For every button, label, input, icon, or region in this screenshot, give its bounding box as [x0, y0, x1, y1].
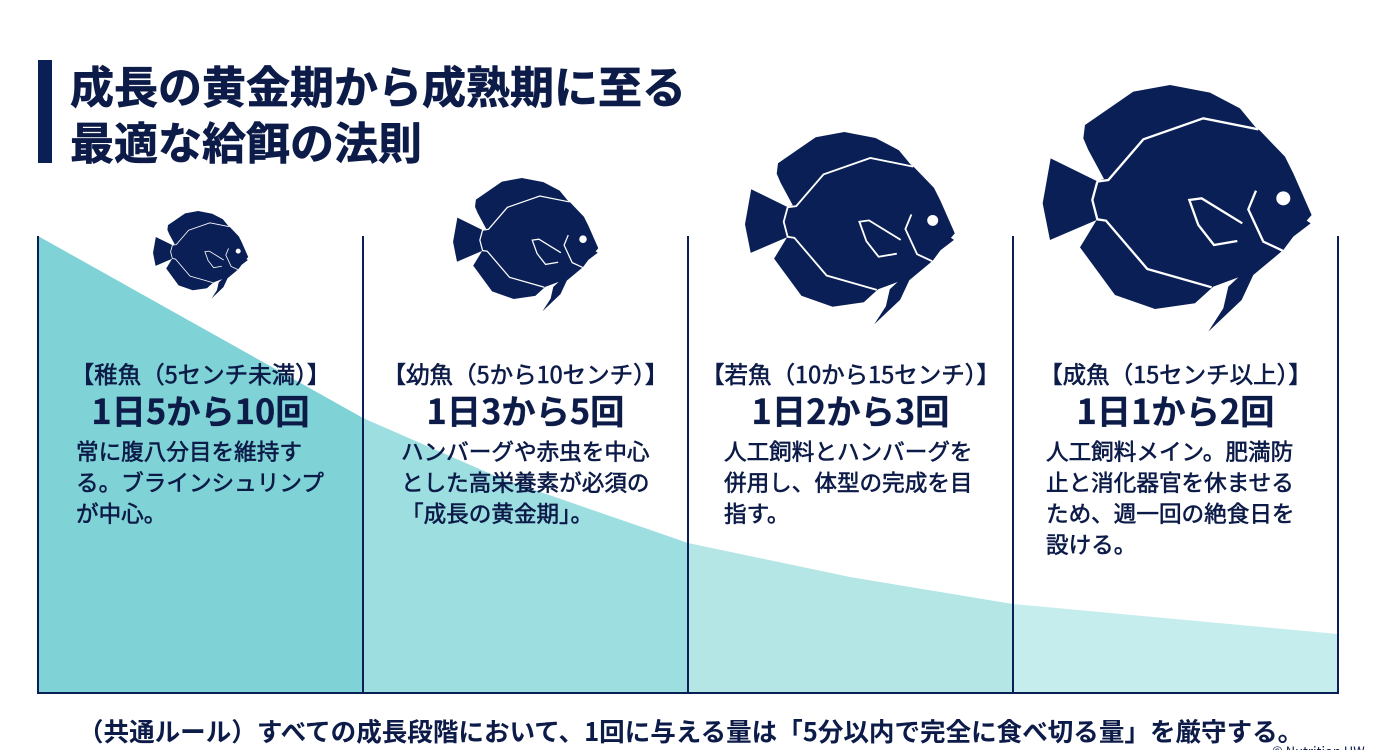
stage 2 description: ハンバーグや赤虫を中心	[401, 434, 650, 467]
stage 2 frequency: 1日3から5回	[427, 384, 624, 434]
stage 2 description: 「成長の黄金期」。	[401, 496, 593, 529]
stage 4 description: 止と消化器官を休ませる	[1046, 465, 1294, 498]
stage 1 description: 常に腹八分目を維持す	[76, 434, 302, 467]
common rule footer: （共通ルール）すべての成長段階において、1回に与える量は「5分以内で完全に食べ切る量」を厳守する。	[78, 712, 1303, 749]
title: 最適な給餌の法則	[70, 108, 422, 172]
stage 3 description: 併用し、体型の完成を目	[724, 465, 973, 498]
stage 3 description: 指す。	[724, 496, 790, 529]
stage 3 description	[724, 434, 973, 529]
title accent bar	[38, 60, 52, 163]
stage 4 description: 設ける。	[1046, 527, 1136, 560]
stage 4 description: 人工飼料メイン。肥満防	[1046, 434, 1293, 467]
stage 3 frequency: 1日2から3回	[752, 384, 949, 434]
stage 1 description: が中心。	[76, 496, 166, 529]
stage 4 description: ため、週一回の絶食日を	[1046, 496, 1295, 529]
stage 1 description: る。ブラインシュリンプ	[76, 465, 324, 498]
stage 2 description: とした高栄養素が必須の	[401, 465, 650, 498]
stage 4 label: 【成魚（15センチ以上）】	[1039, 356, 1312, 390]
title: 成長の黄金期から成熟期に至る	[70, 52, 686, 116]
stage 1 frequency: 1日5から10回	[91, 384, 310, 434]
stage 1 label: 【稚魚（5センチ未満）】	[71, 356, 330, 390]
stage 3 label: 【若魚（10から15センチ）】	[701, 356, 1000, 390]
stage 3 description: 人工飼料とハンバーグを	[724, 434, 973, 467]
stage 4 description	[1046, 434, 1295, 560]
stage 4 frequency: 1日1から2回	[1077, 384, 1274, 434]
title	[70, 52, 686, 172]
stage 2 label: 【幼魚（5から10センチ）】	[383, 356, 668, 390]
stage 2 description	[401, 434, 650, 529]
stage 1 description	[76, 434, 324, 529]
